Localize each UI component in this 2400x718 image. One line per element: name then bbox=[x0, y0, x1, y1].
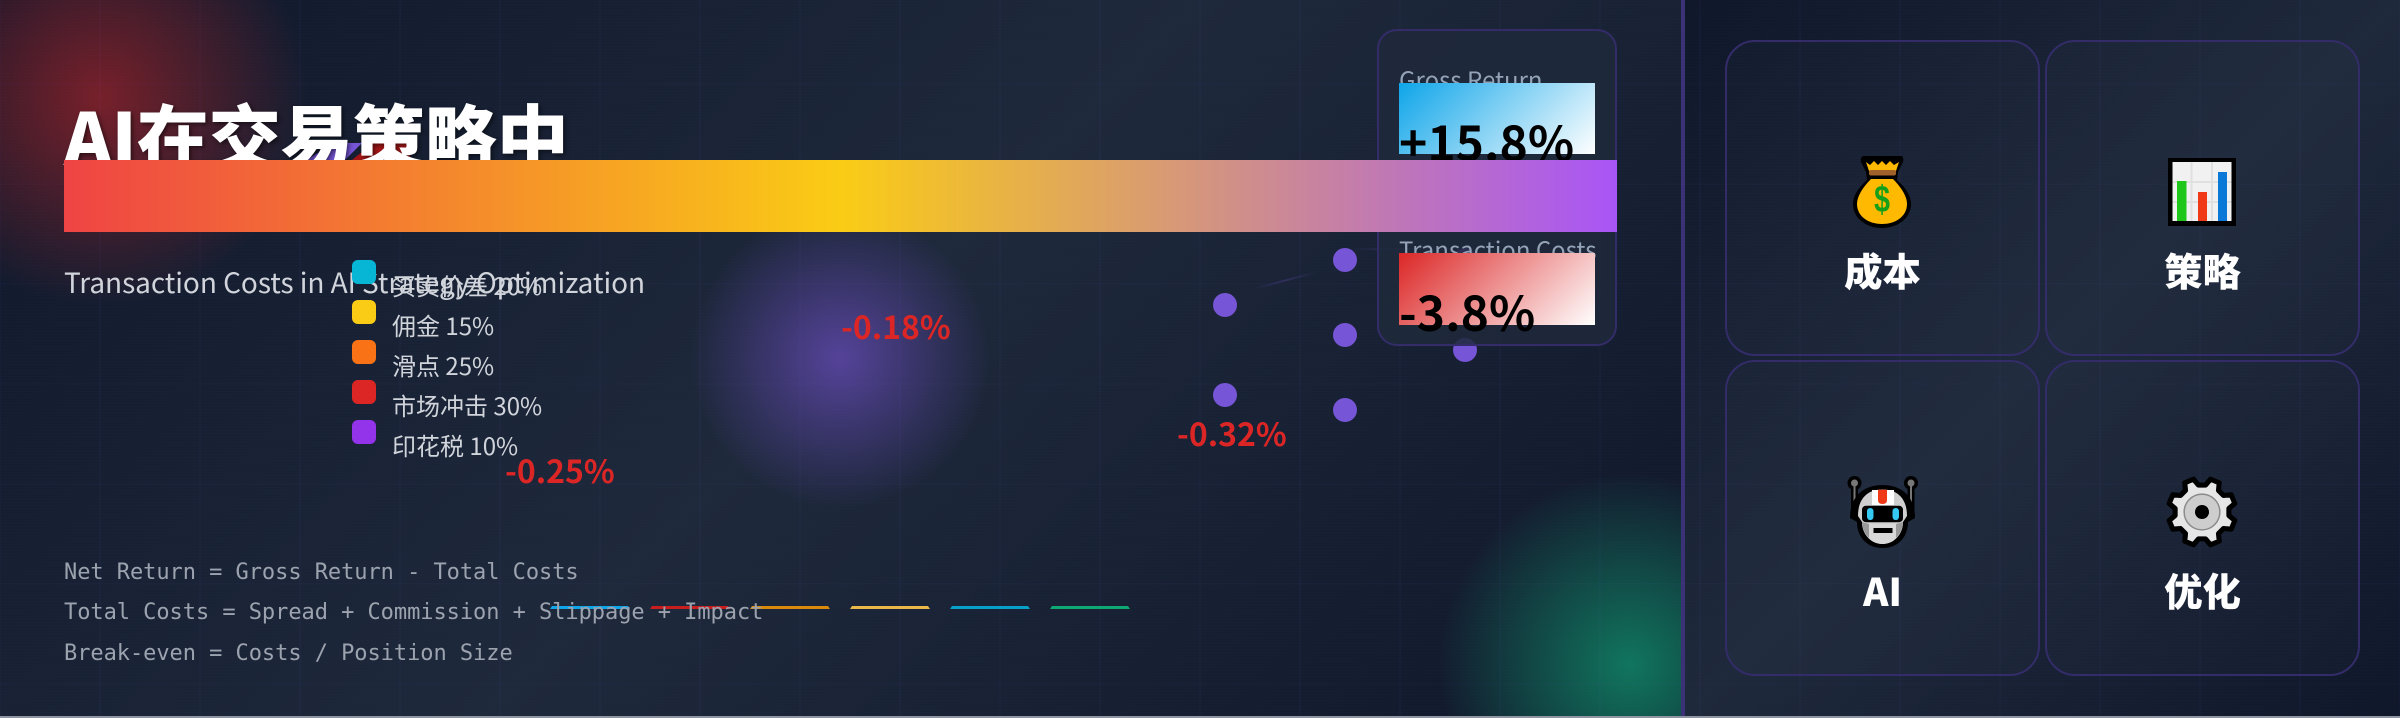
cost label: -0.25%: -0.25% bbox=[505, 447, 615, 493]
node bbox=[1333, 248, 1357, 272]
cost label: -0.18%: -0.18% bbox=[841, 303, 951, 349]
stat value: gross return: +15.8% bbox=[1399, 105, 1574, 175]
pie chart remnant bbox=[308, 143, 410, 160]
neural network bbox=[1213, 248, 1477, 422]
node bbox=[1453, 248, 1477, 272]
legend label: slippage: 滑点 25% bbox=[392, 346, 494, 382]
icon: robot bbox=[1848, 476, 1918, 548]
panel: stats bbox=[1377, 29, 1617, 346]
card: cost bbox=[1725, 40, 2040, 356]
legend bbox=[352, 260, 542, 462]
dash bbox=[550, 606, 630, 609]
legend label: spread: 买卖价差 20% bbox=[392, 266, 542, 302]
legend item: stamp duty bbox=[352, 420, 376, 444]
network connections bbox=[1260, 248, 1377, 288]
dash bbox=[1050, 606, 1130, 609]
card label: 优化 bbox=[2164, 562, 2241, 618]
node bbox=[1213, 293, 1237, 317]
right panel bbox=[1681, 0, 2400, 716]
legend item: commission bbox=[352, 300, 376, 324]
card: AI bbox=[1725, 360, 2040, 676]
red corner glow bbox=[0, 0, 320, 320]
legend label: market impact: 市场冲击 30% bbox=[392, 386, 542, 422]
formula block: Net Return = Gross Return - Total Costs bbox=[64, 560, 579, 585]
card label: 策略 bbox=[2164, 242, 2241, 298]
card label: 成本 bbox=[1844, 242, 1921, 298]
icon: money bag: $ bbox=[1874, 179, 1890, 221]
card: optimization bbox=[2045, 360, 2360, 676]
green corner glow bbox=[1430, 470, 1681, 716]
legend label: stamp duty: 印花税 10% bbox=[392, 426, 518, 462]
stat value: transaction costs: -3.8% bbox=[1399, 275, 1535, 345]
dash bbox=[850, 606, 930, 609]
node bbox=[1333, 398, 1357, 422]
dashed timeline bbox=[550, 606, 1130, 609]
stat swatch: transaction costs bbox=[1399, 253, 1595, 325]
purple center glow bbox=[690, 208, 990, 508]
card: strategy bbox=[2045, 40, 2360, 356]
icon: money bag bbox=[1853, 156, 1911, 228]
node bbox=[1213, 383, 1237, 407]
subtitle: Transaction Costs in AI Strategy Optimization bbox=[64, 262, 645, 302]
icon: gear bbox=[2166, 476, 2238, 548]
dash bbox=[950, 606, 1030, 609]
card label: AI bbox=[1863, 562, 1902, 618]
gradient bar bbox=[64, 160, 1617, 232]
cost label: -0.32%: -0.32% bbox=[1177, 410, 1287, 456]
legend item: market impact bbox=[352, 380, 376, 404]
node bbox=[1333, 323, 1357, 347]
stat label: transaction costs: Transaction Costs bbox=[1399, 231, 1596, 266]
stat swatch: gross return bbox=[1399, 83, 1595, 154]
dash bbox=[750, 606, 830, 609]
dash bbox=[650, 606, 730, 609]
legend label: commission: 佣金 15% bbox=[392, 306, 494, 342]
left panel bbox=[0, 0, 1681, 716]
node bbox=[1453, 338, 1477, 362]
legend item: slippage bbox=[352, 340, 376, 364]
formula block bbox=[64, 560, 763, 666]
legend item: spread bbox=[352, 260, 376, 284]
icon: bar chart bbox=[2168, 158, 2236, 226]
formula block: Total Costs = Spread + Commission + Slippage + Impact bbox=[64, 600, 763, 625]
formula block: Break-even = Costs / Position Size bbox=[64, 641, 513, 666]
title: AI在交易策略中 bbox=[64, 81, 569, 186]
stat label: gross return: Gross Return bbox=[1399, 61, 1543, 96]
